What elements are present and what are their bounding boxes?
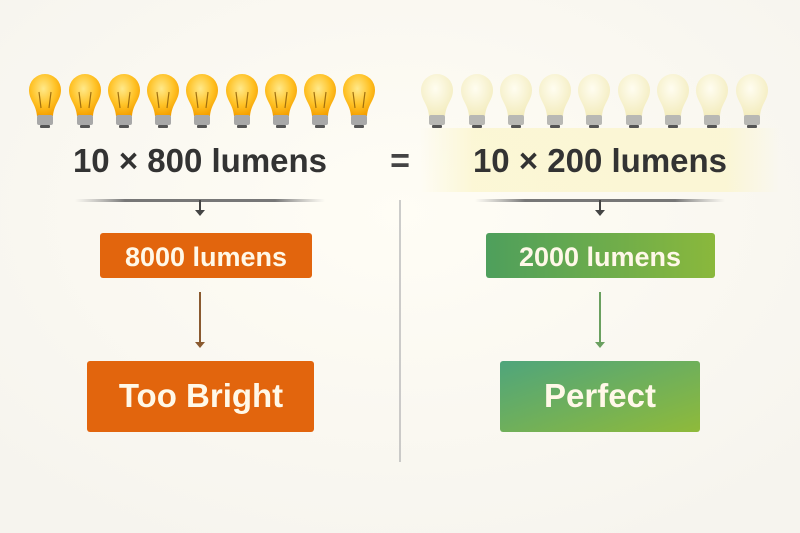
bulbs right [421, 74, 768, 128]
arrow right bottom [595, 292, 605, 348]
glow behind right text [420, 128, 780, 192]
box: 8000 lumens [100, 233, 312, 278]
arrow right top [475, 199, 725, 216]
box: Perfect: Perfect [544, 377, 656, 414]
bulbs left [29, 74, 375, 128]
heading left: 10 × 800 lumens [73, 142, 327, 179]
box: 8000 lumens: 8000 lumens [125, 242, 287, 272]
box: 2000 lumens: 2000 lumens [519, 242, 681, 272]
box: Perfect [500, 361, 700, 432]
arrow left bottom [195, 292, 205, 348]
box: 2000 lumens [486, 233, 715, 278]
arrow left top [75, 199, 325, 216]
equals sign: = [390, 142, 410, 180]
heading right: 10 × 200 lumens [473, 142, 727, 179]
box: Too Bright: Too Bright [119, 377, 283, 414]
box: Too Bright [87, 361, 314, 432]
divider [399, 200, 401, 462]
